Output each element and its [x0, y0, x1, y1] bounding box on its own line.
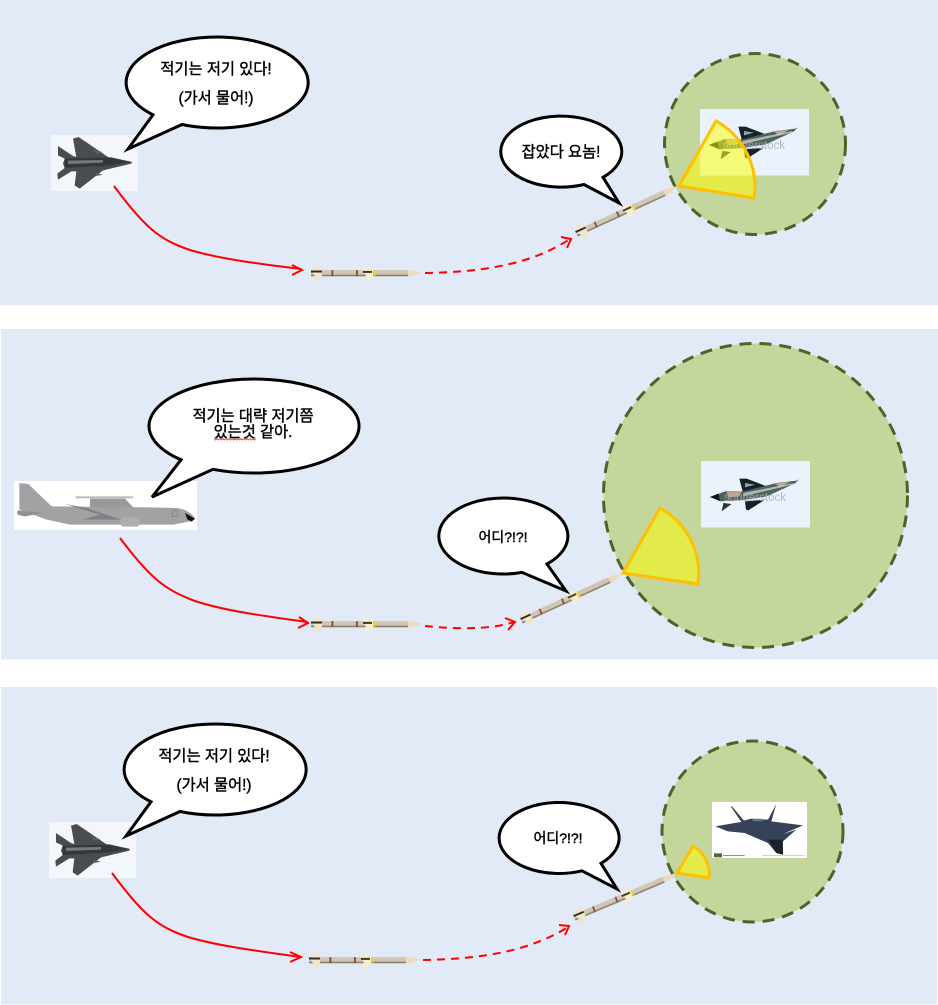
panel 2 speech bubble missile: 어디?!?!: [478, 529, 528, 545]
panel: wrong target scenario: [1, 687, 937, 1004]
panel 3 guidance path solid: [112, 873, 301, 962]
panel 3 speech bubble missile: [499, 802, 619, 889]
panel 2 AEW aircraft image: [14, 481, 197, 530]
panel 2 speech bubble AEW: 적기는 대략 저기쯤: [192, 408, 314, 425]
panel 1 background: [0, 0, 938, 306]
panel 2 speech bubble AEW: [149, 379, 359, 497]
panel 1 fighter jet image: [51, 135, 138, 191]
panel 1 speech bubble missile: [501, 116, 622, 203]
panel 2 speech bubble missile: [439, 498, 568, 591]
panel 2 missile midcourse: [311, 618, 421, 631]
panel 2 background: [1, 329, 938, 660]
panel 3 missile midcourse: [309, 954, 419, 967]
panel 3 guidance path dashed: [423, 925, 569, 960]
panel 1 missile midcourse: [311, 267, 421, 280]
panel 1 seeker cone: [679, 121, 755, 198]
panel 3 missile terminal: [572, 869, 678, 924]
panel 3 background: [1, 687, 937, 1004]
panel 2 seeker range circle: [604, 344, 908, 648]
panel: direct lock scenario: [0, 0, 938, 306]
panel 2 guidance path dashed: [425, 618, 515, 630]
panel 1 speech bubble fighter: (가서 물어!): [179, 90, 253, 107]
panel: AEW rough location scenario: [1, 329, 938, 660]
panel 2 enemy jet image: [701, 461, 810, 528]
panel 3 seeker range circle: [662, 741, 843, 922]
panel 2 speech bubble AEW: 있는것 같아.: [214, 424, 292, 441]
panel 2 guidance path solid: [120, 538, 308, 628]
panel 2 missile terminal: [519, 569, 624, 627]
panel 3 stealth jet image: [712, 802, 807, 858]
panel 3 speech bubble fighter: [124, 724, 306, 836]
panel 1 guidance path solid: [114, 186, 302, 275]
panel 3 fighter jet image: [49, 822, 136, 878]
panel 3 seeker cone: [677, 846, 709, 878]
panel 1 enemy jet image: [700, 109, 809, 176]
panel 3 speech bubble missile: 어디?!?!: [533, 830, 583, 846]
panel 1 speech bubble fighter: 적기는 저기 있다!: [160, 61, 272, 78]
panel 3 speech bubble fighter: 적기는 저기 있다!: [158, 748, 270, 765]
panel 1 guidance path dashed: [425, 237, 571, 273]
panel 2 seeker cone: [623, 508, 699, 584]
panel 1 missile terminal: [574, 182, 679, 240]
panel 1 seeker range circle: [664, 54, 846, 234]
panel 3 speech bubble fighter: (가서 물어!): [177, 777, 251, 794]
panel 1 speech bubble missile: 잡았다 요놈!: [522, 144, 600, 161]
panel 1 speech bubble fighter: [126, 37, 308, 149]
